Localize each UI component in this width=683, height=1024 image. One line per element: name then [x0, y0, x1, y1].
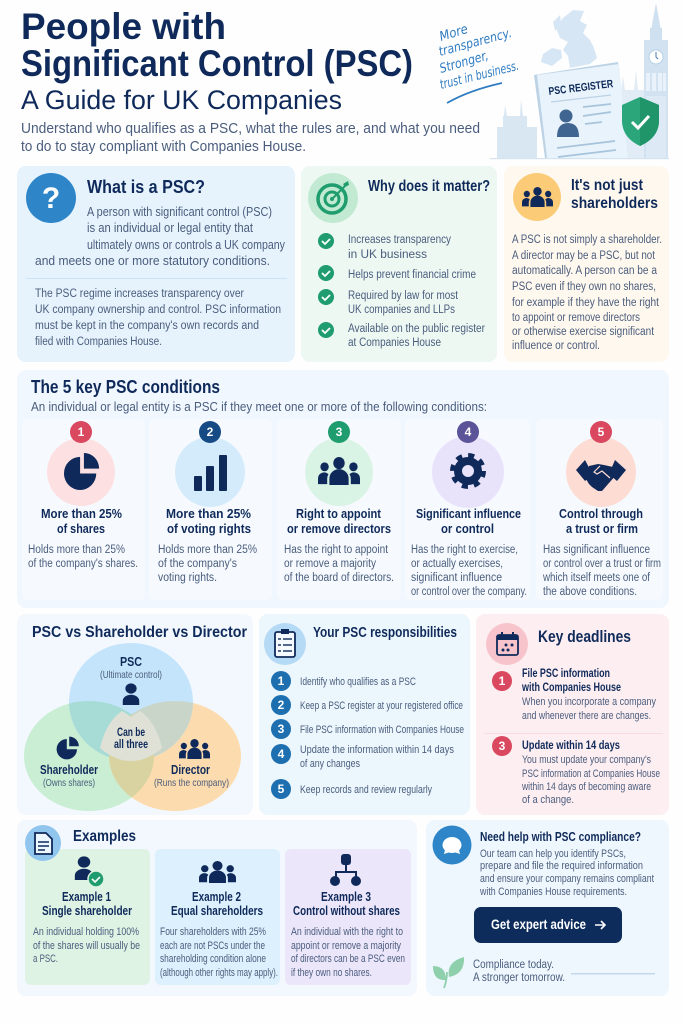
- help text: Our team can help you identify PSCs,: [480, 848, 626, 860]
- definition text: [35, 205, 286, 268]
- explanation text: [512, 234, 662, 352]
- example 3: if they own no shares.: [291, 967, 372, 979]
- checklist: UK companies and LLPs: [348, 304, 455, 316]
- condition 2: [149, 419, 272, 600]
- condition 2: voting rights.: [158, 572, 217, 584]
- panel: Your PSC responsibilities: [259, 614, 470, 815]
- checklist: Increases transparency: [348, 234, 451, 246]
- hero illustration: [437, 3, 669, 159]
- venn label: PSC: PSC: [120, 654, 142, 669]
- heading: It's not just shareholders: shareholders: [571, 195, 658, 212]
- icon: question mark: [26, 173, 76, 223]
- deadline 1: When you incorporate a company: [522, 696, 656, 708]
- condition 3: 3: [336, 425, 343, 439]
- checklist: in UK business: [348, 249, 427, 261]
- handwritten tagline: trust in business.: [438, 59, 521, 93]
- example 1: of the shares will usually be: [33, 940, 140, 952]
- condition 2: of voting rights: [167, 521, 251, 536]
- deadline 2: 3: [499, 739, 506, 753]
- handwritten tagline: Stronger,: [438, 49, 490, 77]
- condition 4: or control: [441, 521, 494, 536]
- example 1: Example 1: [62, 890, 111, 904]
- handwritten tagline: More: [438, 22, 470, 45]
- regime text: The PSC regime increases transparency over: [35, 288, 244, 300]
- example 3: Example 3: [321, 890, 371, 904]
- condition 5: which itself meets one of: [542, 572, 651, 584]
- panel: The 5 key PSC conditions: [17, 370, 669, 608]
- icon: clipboard: [264, 623, 306, 665]
- panel: Need help with PSC compliance?: [426, 820, 669, 996]
- condition 1: of the company's shares.: [28, 558, 138, 570]
- deadline 1: and whenever there are changes.: [522, 710, 651, 722]
- condition 3: [277, 419, 401, 600]
- condition 5: a trust or firm: [566, 521, 638, 536]
- regime text: must be kept in the company's own records and: [35, 320, 259, 332]
- explanation text: automatically. A person can be a: [512, 265, 658, 277]
- venn label: PSC: (Ultimate control): [100, 669, 162, 681]
- example 2: (although other rights may apply).: [160, 967, 278, 979]
- responsibility steps: 4: [278, 747, 285, 761]
- icon: PSC register document: PSC REGISTER: [548, 78, 614, 98]
- condition 2: Holds more than 25%: [158, 544, 257, 556]
- condition 3: or remove a majority: [284, 558, 376, 570]
- condition 5: Has significant influence: [543, 544, 650, 556]
- responsibility steps: Identify who qualifies as a PSC: [300, 676, 416, 688]
- example 3: An individual with the right to: [291, 926, 403, 938]
- icon: leaf: [433, 957, 464, 988]
- checklist: Helps prevent financial crime: [348, 269, 476, 281]
- checklist: [318, 233, 485, 349]
- title block: [21, 6, 480, 155]
- condition 1: Holds more than 25%: [28, 544, 125, 556]
- responsibility steps: Keep records and review regularly: [300, 784, 432, 796]
- responsibility steps: of any changes: [300, 758, 360, 770]
- heading: conditions: The 5 key PSC conditions: [31, 377, 220, 397]
- explanation text: for example if they have the right: [512, 297, 660, 309]
- tagline: A stronger tomorrow.: [473, 972, 565, 984]
- condition 1: of shares: [57, 521, 105, 536]
- definition text: ultimately owns or controls a UK company: [87, 238, 286, 252]
- condition 4: [405, 419, 530, 600]
- heading: What is a PSC?: What is a PSC?: [87, 177, 205, 197]
- condition 4: significant influence: [411, 572, 502, 584]
- responsibility steps: 3: [278, 722, 285, 736]
- responsibility steps: [271, 671, 464, 799]
- explanation text: influence or control.: [512, 340, 600, 352]
- checklist: Required by law for most: [348, 290, 459, 302]
- venn label: Shareholder: Shareholder: [40, 762, 98, 777]
- panel: PSC vs Shareholder vs Director: [17, 614, 253, 815]
- icon: green shield: [622, 97, 659, 146]
- help text: with Companies House requirements.: [479, 886, 627, 898]
- panel: Examples: [17, 820, 417, 996]
- heading: venn: PSC vs Shareholder vs Director: [32, 624, 247, 641]
- button: Get expert advice: Get expert advice: [491, 917, 586, 932]
- example 3: appoint or remove a majority: [291, 940, 401, 952]
- conditions intro: An individual or legal entity is a PSC if they meet one or more of the following conditions:: [31, 400, 487, 414]
- responsibility steps: 5: [278, 782, 285, 796]
- icon: Parliament skyline: [490, 70, 669, 159]
- condition 2: More than 25%: [166, 506, 251, 521]
- button: Get expert advice: [474, 907, 622, 943]
- example 2: Example 2: [192, 890, 241, 904]
- responsibility steps: Update the information within 14 days: [300, 744, 454, 756]
- panel: Key deadlines: [476, 614, 669, 815]
- deadline 2: Update within 14 days: [522, 740, 620, 752]
- example 2: Equal shareholders: [171, 904, 263, 918]
- heading: Examples: Examples: [73, 828, 136, 845]
- example 3: [285, 849, 411, 985]
- venn label: centre: all three: [114, 739, 148, 751]
- definition text: A person with significant control (PSC): [87, 205, 272, 219]
- responsibility steps: 2: [278, 698, 285, 712]
- regime text: UK company ownership and control. PSC information: [35, 304, 281, 316]
- condition 1: [22, 419, 145, 600]
- checklist: at Companies House: [348, 337, 441, 349]
- explanation text: A director may be a PSC, but not: [512, 250, 656, 262]
- example 1: [25, 849, 150, 985]
- condition 3: or remove directors: [287, 521, 391, 536]
- venn label: centre: [114, 727, 148, 751]
- panel: What is a PSC?: [17, 166, 295, 362]
- example 3: Control without shares: [293, 904, 400, 918]
- explanation text: PSC even if they own no shares,: [512, 281, 656, 293]
- handwritten tagline: [437, 22, 521, 103]
- heading: Key deadlines: Key deadlines: [538, 627, 631, 646]
- subtitle: A Guide for UK Companies: [21, 85, 342, 115]
- condition 5: the above conditions.: [543, 586, 637, 598]
- checklist: Available on the public register: [348, 323, 485, 335]
- icon: PSC register document: [534, 62, 628, 158]
- deadline 2: of a change.: [522, 794, 574, 806]
- help text: [479, 848, 654, 898]
- icon: question mark: ?: [42, 182, 60, 215]
- regime text: [35, 288, 281, 348]
- tagline: Compliance today.: [473, 959, 554, 971]
- condition 5: Control through: [559, 506, 643, 521]
- deadline 1: [492, 668, 656, 722]
- panel: It's not just shareholders: [504, 166, 669, 362]
- example 2: shareholding condition alone: [160, 953, 266, 965]
- icon: Big Ben: [644, 3, 668, 158]
- deadline 2: within 14 days of becoming aware: [521, 781, 651, 793]
- heading: responsibilities: Your PSC responsibilities: [313, 625, 457, 641]
- condition 1: More than 25%: [41, 506, 122, 521]
- help text: prepare and file the required information: [480, 860, 643, 872]
- condition 3: Right to appoint: [296, 506, 382, 521]
- example 3: of directors can be a PSC even: [291, 953, 405, 965]
- explanation text: to appoint or remove directors: [512, 312, 640, 324]
- intro text: [21, 120, 480, 155]
- deadline 2: [492, 736, 660, 806]
- heading: need help: Need help with PSC compliance?: [480, 829, 641, 844]
- condition 3: Has the right to appoint: [284, 544, 389, 556]
- explanation text: or otherwise exercise significant: [512, 326, 655, 338]
- venn diagram: [24, 643, 241, 811]
- venn label: Director: Director: [171, 762, 210, 777]
- intro text: to do to stay compliant with Companies House.: [21, 138, 306, 155]
- definition text: and meets one or more statutory conditions.: [35, 254, 270, 268]
- deadline 1: with Companies House: [521, 682, 621, 694]
- example 1: a PSC.: [33, 953, 58, 965]
- responsibility steps: File PSC information with Companies House: [300, 724, 464, 736]
- icon: group on orange circle: [513, 173, 561, 221]
- condition 4: 4: [465, 425, 472, 439]
- icon: document: [25, 825, 61, 861]
- condition 4: or control over the company.: [411, 586, 527, 598]
- condition 5: 5: [598, 425, 605, 439]
- venn label: Shareholder: [40, 737, 98, 789]
- example 2: each are not PSCs under the: [160, 940, 265, 952]
- icon: target: [308, 173, 358, 223]
- main title: Significant Control (PSC): [21, 43, 413, 84]
- example 2: Four shareholders with 25%: [160, 926, 266, 938]
- condition 3: of the board of directors.: [284, 572, 394, 584]
- condition 2: of the company's: [158, 558, 237, 570]
- condition 4: Has the right to exercise,: [411, 544, 518, 556]
- venn label: PSC: [100, 654, 162, 705]
- condition 2: 2: [207, 425, 214, 439]
- panel: Why does it matter?: [301, 166, 497, 362]
- heading: It's not just shareholders: [571, 177, 658, 212]
- deadline 1: File PSC information: [522, 668, 610, 680]
- venn label: Director: [154, 739, 229, 789]
- heading: It's not just shareholders: It's not just: [571, 177, 644, 194]
- icon: UK map: [541, 10, 597, 68]
- condition 4: or actually exercises,: [411, 558, 503, 570]
- example 1: An individual holding 100%: [33, 926, 139, 938]
- intro text: Understand who qualifies as a PSC, what the rules are, and what you need: [21, 120, 480, 137]
- example 1: Single shareholder: [42, 904, 132, 918]
- deadline 2: You must update your company's: [522, 754, 651, 766]
- venn label: Director: (Runs the company): [154, 777, 229, 789]
- main title: [21, 6, 413, 84]
- definition text: is an individual or legal entity that: [87, 221, 253, 235]
- condition 1: 1: [78, 425, 85, 439]
- venn label: centre: Can be: [117, 727, 145, 739]
- deadline 1: 1: [499, 674, 506, 688]
- icon: calendar: [486, 623, 528, 665]
- venn label: Shareholder: (Owns shares): [43, 777, 95, 789]
- icon: speech bubble: [432, 826, 472, 864]
- responsibility steps: Keep a PSC register at your registered office: [300, 700, 463, 712]
- condition 5: [536, 419, 663, 600]
- heading: Why does it matter?: Why does it matter?: [368, 178, 490, 195]
- main title: People with: [21, 6, 226, 47]
- example 2: [155, 849, 280, 985]
- handwritten tagline: transparency.: [437, 26, 513, 60]
- regime text: filed with Companies House.: [35, 336, 162, 348]
- tagline: [473, 959, 565, 984]
- condition 4: Significant influence: [416, 506, 521, 521]
- responsibility steps: 1: [278, 674, 285, 688]
